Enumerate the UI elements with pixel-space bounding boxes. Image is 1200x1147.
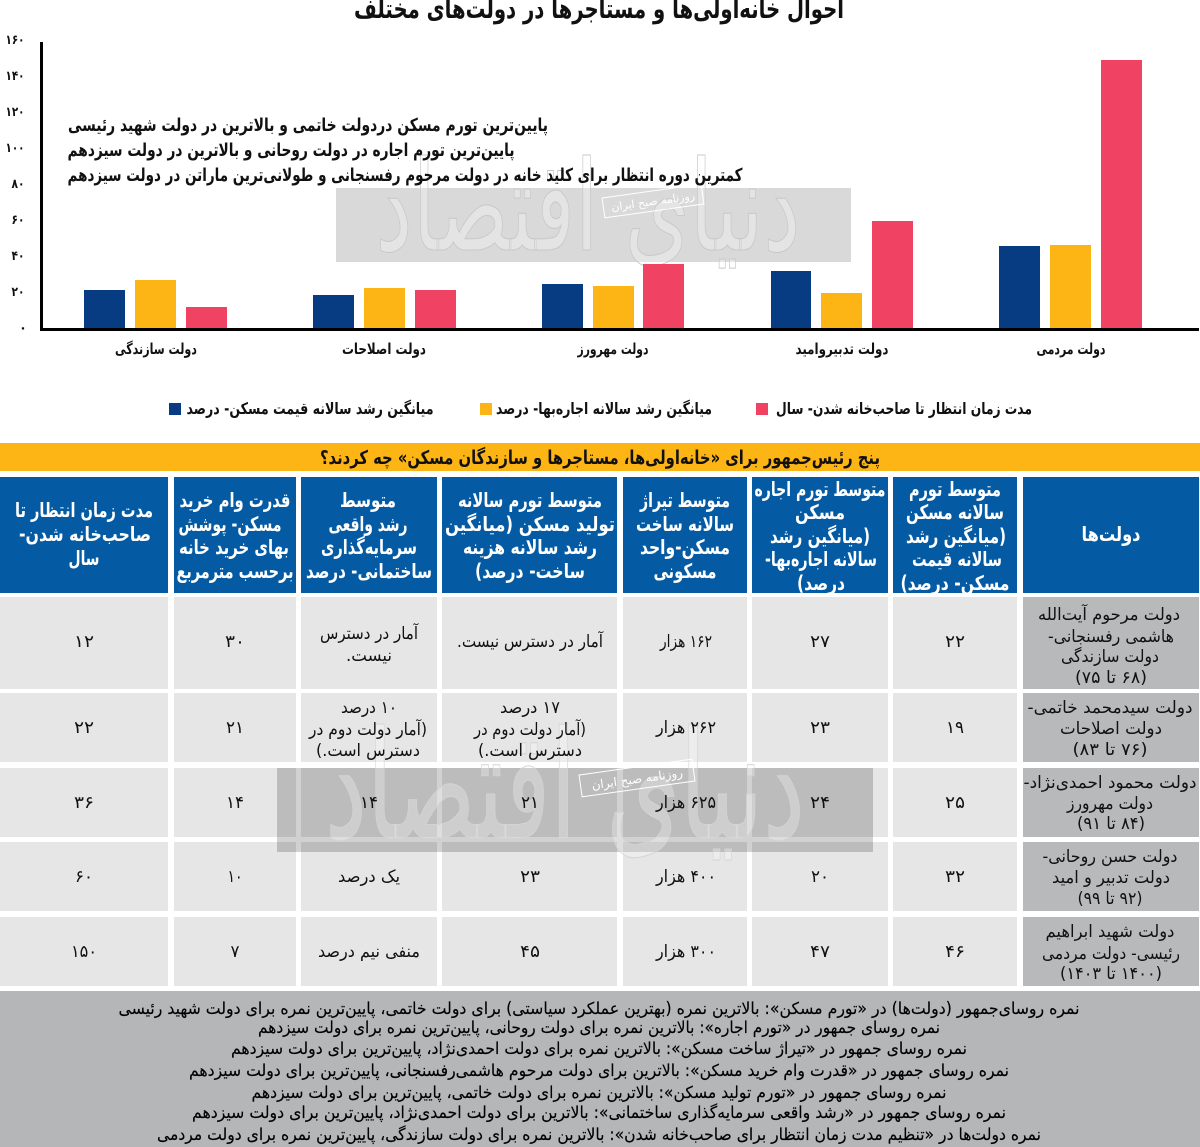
bars: دولت مردمی [999, 60, 1142, 329]
row: دولت مهرورز: دولت محمود احمدی‌نژاد- [1024, 773, 1196, 793]
row: دولت اصلاحات: ۲۲ [74, 718, 94, 738]
row: دولت سازندگی [74, 603, 1180, 688]
bars: دولت تدبیروامید [771, 221, 913, 329]
row: دولت تدبیر و امید [75, 847, 1178, 909]
row: دولت مردمی: منفی نیم درصد [318, 942, 420, 962]
footer notes: نمره روسای‌جمهور (دولت‌ها) در «تورم مسکن»: بالاترین نمره (بهترین عملکرد سیاستی) برای دولت خاتمی، پایین‌ترین نمره برای دولت شهید رئیسی [118, 999, 1080, 1019]
table header: (میانگین رشد [906, 524, 1006, 548]
row: دولت مهرورز: ۱۴ [360, 793, 378, 813]
row: دولت مردمی: ۴۷ [810, 942, 830, 962]
row: دولت تدبیر و امید: ۳۲ [945, 867, 965, 887]
category labels: دولت سازندگی [115, 340, 197, 358]
row: دولت تدبیر و امید: ۲۳ [520, 867, 540, 887]
footer notes: نمره روسای جمهور در «تورم تولید مسکن»: بالاترین نمره برای دولت خاتمی، پایین‌ترین برای دولت سیزدهم [252, 1083, 946, 1103]
banner heading: پنج رئیس‌جمهور برای «خانه‌اولی‌ها، مستاجرها و سازندگان مسکن» چه کردند؟ [320, 446, 880, 469]
watermark: chart: دنیای اقتصاد [376, 135, 800, 280]
row: دولت اصلاحات: (۷۶ تا ۸۳) [1072, 740, 1148, 760]
row: دولت مهرورز: ۶۲۵ هزار [655, 793, 716, 813]
table header: دولت‌ها [1082, 522, 1140, 546]
row: دولت مهرورز: (۸۴ تا ۹۱) [1077, 814, 1145, 834]
row: دولت سازندگی: (۶۸ تا ۷۵) [1075, 668, 1147, 688]
row: دولت مردمی: دولت شهید ابراهیم [1046, 922, 1174, 942]
table header: صاحب‌خانه شدن- [19, 522, 151, 546]
table header: ساخت- درصد) [475, 559, 585, 583]
row: دولت مهرورز: ۳۶ [74, 793, 94, 813]
row: دولت مردمی: ۳۰۰ هزار [655, 942, 716, 962]
table header: مسکن- درصد) [900, 571, 1010, 595]
table header: متوسط تیراژ [639, 488, 730, 512]
footer notes: نمره دولت‌ها در «تنظیم مدت زمان انتظار برای صاحب‌خانه شدن»: بالاترین نمره برای دولت سازندگی، پایین‌ترین نمره برای دولت مردمی [157, 1125, 1041, 1145]
chart annotation: کمترین دوره انتظار برای کلید خانه در دولت مرحوم رفسنجانی و طولانی‌ترین ماراتن در دولت سیزدهم [68, 165, 743, 186]
row: دولت سازندگی: آمار در دسترس نیست. [457, 630, 604, 652]
row: دولت اصلاحات: ۲۳ [810, 718, 830, 738]
row: دولت تدبیر و امید: ۴۰۰ هزار [655, 867, 716, 887]
row: دولت تدبیر و امید: ۲۰ [811, 867, 829, 887]
legend: میانگین رشد سالانه اجاره‌بها- درصد [496, 399, 712, 418]
table header: رشد واقعی [328, 512, 408, 536]
y axis labels: ۲۰ [12, 285, 24, 300]
row: دولت سازندگی: دولت سازندگی [1061, 646, 1159, 667]
row: دولت مهرورز: ۲۱ [521, 793, 539, 813]
watermark: table [277, 700, 873, 874]
table header: مسکونی [654, 559, 716, 583]
row: دولت تدبیر و امید: دولت حسن روحانی- [1042, 847, 1178, 867]
table body backgrounds [0, 597, 1199, 986]
row: دولت سازندگی: ۱۶۲ هزار [659, 632, 712, 652]
row: دولت اصلاحات: (آمار دولت دوم در [473, 718, 586, 740]
table header: سالانه مسکن [906, 500, 1004, 524]
chart annotation: پایین‌ترین تورم اجاره در دولت روحانی و بالاترین در دولت سیزدهم [68, 140, 514, 161]
row: دولت سازندگی: آمار در دسترس [320, 622, 419, 644]
row: دولت اصلاحات: ۱۷ درصد [500, 698, 560, 718]
bars: دولت اصلاحات [313, 288, 456, 329]
row: دولت اصلاحات: دولت سیدمحمد خاتمی- [1028, 698, 1192, 718]
category labels: دولت اصلاحات [342, 340, 426, 358]
row: دولت مردمی [71, 922, 1180, 984]
category labels [115, 340, 1106, 358]
watermark: chart: روزنامه صبح ایران [610, 189, 696, 214]
table header: مسکن [795, 500, 845, 524]
y axis labels: ۸۰ [12, 177, 24, 192]
row: دولت مهرورز: ۲۵ [945, 793, 965, 813]
row: دولت سازندگی: ۱۲ [74, 632, 94, 652]
footer notes: نمره روسای جمهور در «تورم اجاره»: بالاترین نمره برای دولت روحانی، پایین‌ترین نمره برای دولت سیزدهم [258, 1018, 940, 1038]
table header: مسکن-واحد [640, 535, 730, 559]
row: دولت اصلاحات [74, 698, 1192, 761]
chart annotation [68, 115, 743, 186]
row: دولت مردمی: (۱۴۰۰ تا ۱۴۰۳) [1060, 964, 1162, 984]
row: دولت تدبیر و امید: یک درصد [338, 867, 400, 887]
axes [40, 42, 1199, 331]
table header: ساختمانی- درصد [306, 559, 432, 583]
table header: مسکن- پوشش [178, 512, 282, 537]
row: دولت سازندگی: هاشمی رفسنجانی- [1048, 627, 1174, 647]
table header: متوسط تورم سالانه [458, 488, 602, 512]
legend [169, 399, 1032, 418]
row: دولت مردمی: رئیسی- دولت مردمی [1042, 944, 1180, 964]
footer notes: نمره روسای جمهور در «رشد واقعی سرمایه‌گذاری ساختمانی»: بالاترین برای دولت احمدی‌نژاد، پایین‌ترین برای دولت سیزدهم [192, 1103, 1006, 1123]
row: دولت تدبیر و امید: (۹۲ تا ۹۹) [1078, 889, 1142, 909]
footer notes: نمره روسای جمهور در «تیراژ ساخت مسکن»: بالاترین نمره برای دولت احمدی‌نژاد، پایین‌ترین برای دولت سیزدهم [231, 1039, 967, 1059]
row: دولت اصلاحات: ۱۹ [946, 718, 964, 738]
row: دولت اصلاحات: ۱۰ درصد [341, 698, 397, 718]
watermark: table: روزنامه صبح ایران [591, 766, 684, 793]
chart annotation: پایین‌ترین تورم مسکن دردولت خاتمی و بالاترین در دولت شهید رئیسی [68, 115, 548, 136]
row: دولت تدبیر و امید: ۶۰ [75, 867, 93, 887]
table header: متوسط [340, 488, 396, 512]
legend: مدت زمان انتظار تا صاحب‌خانه شدن- سال [776, 399, 1032, 418]
table header: برحسب مترمربع [176, 559, 294, 583]
table header: سالانه قیمت [912, 547, 1002, 571]
table header: تولید مسکن (میانگین [445, 512, 615, 536]
row: دولت مهرورز [74, 773, 1196, 834]
row: دولت اصلاحات: (آمار دولت دوم در [308, 718, 427, 740]
row: دولت اصلاحات: ۲۶۲ هزار [655, 718, 716, 738]
y axis labels: ۱۶۰ [6, 33, 24, 48]
category labels: دولت تدبیروامید [796, 340, 889, 358]
y axis labels: ۱۰۰ [6, 141, 24, 156]
y axis labels: ۱۴۰ [6, 69, 24, 84]
footer notes [0, 991, 1200, 1147]
row: دولت مهرورز: دولت مهرورز [1066, 794, 1153, 814]
table header: سال [68, 546, 100, 570]
row: دولت سازندگی: ۲۷ [810, 632, 830, 652]
row: دولت اصلاحات: دسترس است.) [478, 741, 582, 761]
row: دولت مردمی: ۱۵۰ [71, 942, 97, 962]
footer notes: نمره روسای جمهور در «قدرت وام خرید مسکن»: بالاترین برای دولت مرحوم هاشمی‌رفسنجانی، پایین‌ترین برای دولت سیزدهم [189, 1061, 1009, 1081]
y axis labels: ۱۲۰ [6, 105, 24, 120]
banner heading [0, 443, 1200, 471]
y axis labels: ۴۰ [12, 249, 24, 264]
table header: (میانگین رشد [770, 524, 870, 548]
y axis labels: ۶۰ [12, 213, 24, 228]
bar chart [6, 33, 1199, 358]
row: دولت اصلاحات: دسترس است.) [316, 741, 420, 761]
table header: سالانه اجاره‌بها- [765, 547, 877, 571]
row: دولت مردمی: ۴۵ [520, 942, 540, 962]
table header: سالانه ساخت [636, 512, 734, 536]
category labels: دولت مردمی [1036, 340, 1106, 358]
bars: دولت سازندگی [84, 280, 227, 329]
row: دولت سازندگی: ۳۰ [225, 632, 245, 652]
row: دولت سازندگی: دولت مرحوم آیت‌الله [1038, 603, 1180, 625]
row: دولت اصلاحات: دولت اصلاحات [1060, 719, 1162, 739]
legend: میانگین رشد سالانه قیمت مسکن- درصد [186, 399, 434, 418]
row: دولت اصلاحات: ۲۱ [226, 718, 244, 738]
row: دولت تدبیر و امید: دولت تدبیر و امید [1052, 868, 1170, 888]
table header: متوسط تورم اجاره [754, 477, 886, 501]
row: دولت مهرورز: ۱۴ [226, 793, 244, 813]
row: دولت سازندگی: ۲۲ [945, 632, 965, 652]
table header: رشد سالانه هزینه [463, 535, 597, 559]
row: دولت مردمی: ۷ [230, 942, 240, 962]
table header: متوسط تورم [909, 477, 1001, 501]
row: دولت تدبیر و امید: ۱۰ [228, 867, 242, 887]
table header: مدت زمان انتظار تا [15, 498, 153, 522]
row: دولت سازندگی: نیست. [346, 646, 392, 666]
y axis labels: ۰ [19, 321, 27, 336]
table header: درصد) [797, 571, 845, 595]
row: دولت مردمی: ۴۶ [945, 942, 965, 962]
table header: سرمایه‌گذاری [321, 535, 417, 559]
row: دولت مهرورز: ۲۴ [810, 793, 830, 813]
table header: بهای خرید خانه [179, 535, 289, 559]
table header [0, 477, 1199, 595]
y axis labels [6, 33, 27, 336]
table header: قدرت وام خرید [180, 488, 290, 512]
watermark: table: دنیای اقتصاد [325, 700, 805, 874]
bars: دولت مهرورز [542, 264, 684, 329]
category labels: دولت مهرورز [577, 340, 649, 358]
